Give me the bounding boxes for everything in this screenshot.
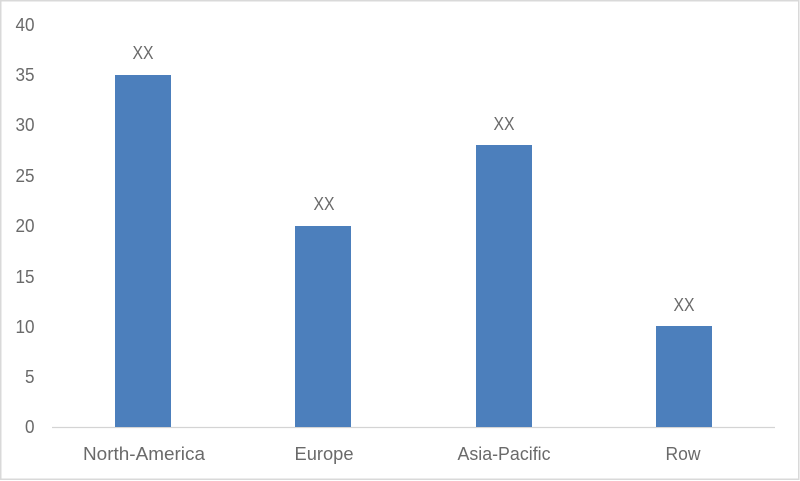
data labels: XX — [494, 114, 514, 134]
bars — [115, 75, 712, 427]
bar: Asia-Pacific — [476, 145, 532, 427]
y axis labels: 25 — [16, 166, 34, 186]
y axis labels: 15 — [16, 267, 34, 287]
y axis labels: 30 — [16, 115, 34, 135]
data labels: XX — [314, 194, 334, 214]
data labels: XX — [132, 43, 154, 63]
y axis labels: 40 — [16, 15, 34, 35]
x axis line — [52, 426, 775, 428]
category labels: Asia-Pacific — [458, 444, 550, 464]
bar: Row — [656, 326, 712, 427]
data labels — [132, 43, 694, 315]
data labels: XX — [674, 295, 694, 315]
y axis labels: 0 — [25, 417, 34, 437]
y axis labels: 10 — [16, 317, 34, 337]
category labels: Europe — [294, 444, 354, 464]
y axis labels: 20 — [16, 216, 34, 236]
bar: Europe — [295, 226, 351, 427]
category labels — [83, 444, 701, 464]
bar: North-America — [115, 75, 171, 427]
category labels: Row — [666, 444, 701, 464]
y axis labels: 35 — [16, 65, 34, 85]
category labels: North-America — [83, 444, 206, 464]
y axis labels — [16, 15, 34, 437]
y axis labels: 5 — [25, 367, 34, 387]
